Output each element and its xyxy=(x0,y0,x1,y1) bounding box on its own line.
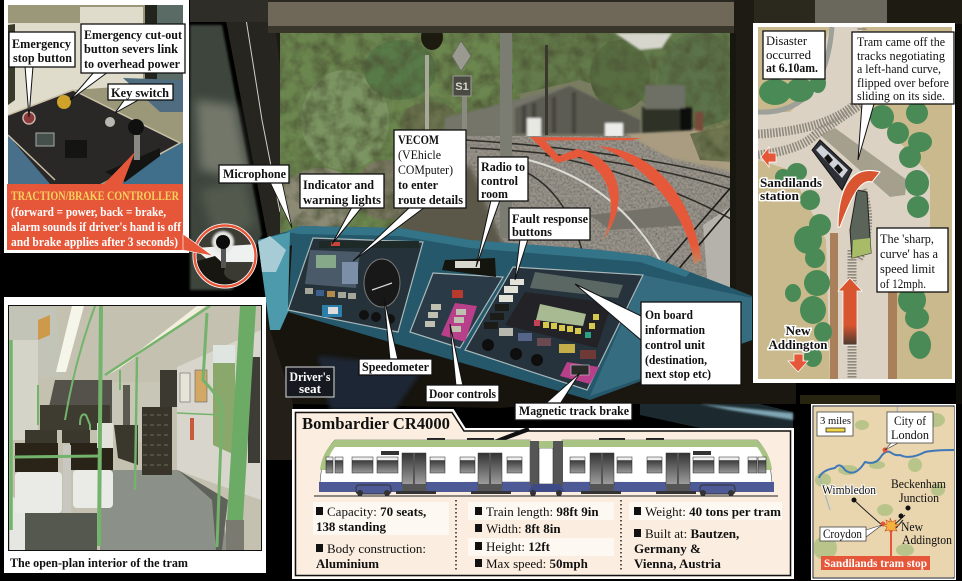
label: Beckenham Junction: Beckenham xyxy=(891,476,946,491)
right window post xyxy=(730,33,736,290)
label: magnetic track brake xyxy=(515,373,632,420)
ground and gravel xyxy=(400,125,733,290)
label: VECOM: COMputer) xyxy=(398,162,453,177)
panel: tram interior photo xyxy=(4,297,266,573)
label: New Addington: Addington xyxy=(902,532,952,547)
instrument panel 2 xyxy=(410,258,503,348)
roads xyxy=(758,27,930,379)
labels in inset: stop button xyxy=(13,50,73,65)
far end of tram xyxy=(50,380,112,423)
red arrow, curve xyxy=(838,170,880,227)
labels in inset xyxy=(9,24,185,117)
tram side elevation xyxy=(314,427,778,496)
spec column 1: Aluminium xyxy=(316,556,379,571)
callout: disaster time: Disaster xyxy=(766,33,808,48)
label: Wimbledon: Wimbledon xyxy=(822,482,876,497)
scale bar xyxy=(817,412,853,436)
spec column 1: 138 standing xyxy=(316,519,386,534)
label: Sandilands tram stop: Sandilands tram stop xyxy=(824,556,927,570)
red text block: alarm sounds if driver's hand is off xyxy=(11,219,182,234)
arrow to Sandilands xyxy=(761,147,776,167)
windscreen view with track xyxy=(280,24,742,290)
label: VECOM xyxy=(353,130,466,261)
label: microphone xyxy=(219,165,292,228)
spec column 3: Vienna, Austria xyxy=(634,556,721,571)
callout: derailment: Tram came off the xyxy=(857,34,945,49)
panel: tram interior photo: The open-plan interior of the tram xyxy=(10,555,188,570)
label: radio to control room: room xyxy=(481,186,508,201)
label: on board information control unit: On board xyxy=(645,307,694,322)
red text block xyxy=(7,152,183,250)
callout: disaster time: at 6.10am. xyxy=(766,60,818,75)
callout: derailment: a left-hand curve, xyxy=(857,61,941,76)
dashboard xyxy=(258,226,752,410)
tram wreck xyxy=(812,140,871,258)
label: VECOM: (VEhicle xyxy=(398,147,441,162)
spec column 2: Max speed: 50mph xyxy=(486,556,589,571)
panel: Bombardier CR4000 specifications xyxy=(293,410,793,578)
poles xyxy=(11,306,222,547)
sky xyxy=(615,33,672,50)
label: Sandilands tram stop xyxy=(821,530,930,570)
map label: New Addington: New xyxy=(786,323,811,338)
windows xyxy=(326,457,766,473)
label: Croydon: Croydon xyxy=(823,526,862,541)
label: fault response buttons: Fault response xyxy=(512,211,588,226)
callout: derailment: tracks negotiating xyxy=(857,48,945,63)
photo of control panel xyxy=(8,5,183,184)
panel: crash site map xyxy=(753,23,955,383)
side window and pillar xyxy=(190,0,300,290)
trees xyxy=(759,73,932,367)
label: door controls xyxy=(426,324,499,402)
labels in inset: Key switch xyxy=(111,85,170,100)
spec column 1: Body construction: xyxy=(327,541,426,556)
spec column 3: Weight: 40 tons per tram xyxy=(645,504,781,519)
callout: disaster time xyxy=(763,31,825,79)
map label: New Addington xyxy=(768,323,828,352)
labels in inset: Emergency cut-out xyxy=(84,27,183,42)
label: indicator and warning lights: warning lights xyxy=(303,192,381,207)
label: Beckenham Junction: Junction xyxy=(899,490,939,505)
label: on board information control unit xyxy=(575,284,741,385)
poles and signs: S1 xyxy=(455,81,469,93)
red route arrows xyxy=(530,137,702,264)
label: Croydon xyxy=(820,525,882,541)
red text block: TRACTION/BRAKE CONTROLLER xyxy=(11,188,179,203)
label: indicator and warning lights: Indicator and xyxy=(303,177,375,192)
labels in inset: to overhead power xyxy=(84,56,180,71)
label: door controls: Door controls xyxy=(429,386,496,401)
label: New Addington: New xyxy=(901,519,924,534)
callout: derailment: sliding on its side. xyxy=(857,88,945,103)
label: radio to control room xyxy=(476,157,528,267)
foliage left xyxy=(280,33,520,240)
spec column 3: Built at: Bautzen, xyxy=(645,526,739,541)
label: speedometer: Speedometer xyxy=(362,359,429,374)
label: driver's seat: Driver's xyxy=(290,369,330,384)
spec column 1 xyxy=(316,504,426,571)
spec column 2: Height: 12ft xyxy=(486,539,551,554)
label: City of London: City of xyxy=(894,413,927,428)
callout: speed limit: of 12mph. xyxy=(880,276,926,291)
label: City of London: London xyxy=(891,427,929,442)
red text block: (forward = power, back = brake, xyxy=(11,204,166,219)
foliage right and sky xyxy=(512,33,730,131)
heading: Bombardier CR4000 xyxy=(302,414,450,433)
label: on board information control unit: control unit xyxy=(645,337,706,352)
spec column 3: Germany & xyxy=(634,541,701,556)
map label: Sandilands station xyxy=(760,175,822,203)
label: fault response buttons: buttons xyxy=(512,224,552,239)
callout: derailment: flipped over before xyxy=(857,75,949,90)
label: fault response buttons xyxy=(509,208,590,280)
spec column 2: Width: 8ft 8in xyxy=(486,521,561,536)
seats xyxy=(25,430,57,443)
label: on board information control unit: next stop etc) xyxy=(645,366,711,381)
callout: disaster time: occurred xyxy=(766,47,811,62)
label: microphone: Microphone xyxy=(223,166,286,181)
right wall xyxy=(177,330,261,500)
label: magnetic track brake: Magnetic track brake xyxy=(519,403,629,418)
map label: Sandilands station: station xyxy=(760,188,800,203)
instrument panel 3 xyxy=(465,267,643,390)
label: on board information control unit: information xyxy=(645,322,706,337)
spec column 2 xyxy=(475,504,599,571)
arrow to New Addington xyxy=(788,354,808,372)
label: City of London xyxy=(885,412,933,450)
instrument panel 1 xyxy=(288,238,423,332)
rails xyxy=(466,139,730,268)
callout: speed limit: The 'sharp, xyxy=(880,231,934,246)
red arrow, straight xyxy=(838,278,862,345)
callout: speed limit xyxy=(877,228,948,292)
label: driver's seat: seat xyxy=(299,381,322,396)
interior photograph xyxy=(9,306,261,550)
panel: traction brake controller inset xyxy=(4,0,189,253)
callout: derailment xyxy=(852,32,954,160)
doors xyxy=(402,453,690,485)
floor xyxy=(100,470,230,550)
label: New Addington xyxy=(901,519,952,547)
panel: locator map xyxy=(811,404,956,580)
map label: Sandilands station: Sandilands xyxy=(760,175,822,190)
dividers xyxy=(456,500,621,572)
bogies xyxy=(356,485,735,496)
left dash end xyxy=(258,232,290,330)
red text block: and brake applies after 3 seconds) xyxy=(11,234,178,249)
labels in inset: button severs link xyxy=(84,41,179,56)
label: indicator and warning lights xyxy=(300,174,384,244)
label: Beckenham Junction xyxy=(891,476,946,505)
poles and signs xyxy=(421,24,548,238)
label: radio to control room: Radio to xyxy=(481,159,525,174)
label: VECOM: VECOM xyxy=(398,132,439,147)
icon: circled joystick xyxy=(183,225,258,290)
label: on board information control unit: (destination, xyxy=(645,352,707,367)
callout: speed limit: speed limit xyxy=(880,261,935,276)
cutting wall and bridge xyxy=(445,85,703,140)
spec column 2: Train length: 98ft 9in xyxy=(486,504,599,519)
spec column 1: Capacity: 70 seats, xyxy=(327,504,426,519)
sun visor xyxy=(268,0,734,33)
label: driver's seat xyxy=(286,367,334,397)
label: radio to control room: control xyxy=(481,173,518,188)
tracks xyxy=(758,27,875,379)
labels in inset: Emergency xyxy=(12,36,71,51)
label: speedometer xyxy=(359,297,432,375)
highlight strips xyxy=(313,502,782,556)
map label: New Addington: Addington xyxy=(768,337,828,352)
scale bar: 3 miles xyxy=(820,415,851,427)
label: VECOM: to enter xyxy=(398,177,438,192)
label: VECOM: route details xyxy=(398,192,463,207)
callout: speed limit: curve' has a xyxy=(880,246,938,261)
spec column 3 xyxy=(634,504,781,571)
ceiling and left wall xyxy=(10,307,65,377)
